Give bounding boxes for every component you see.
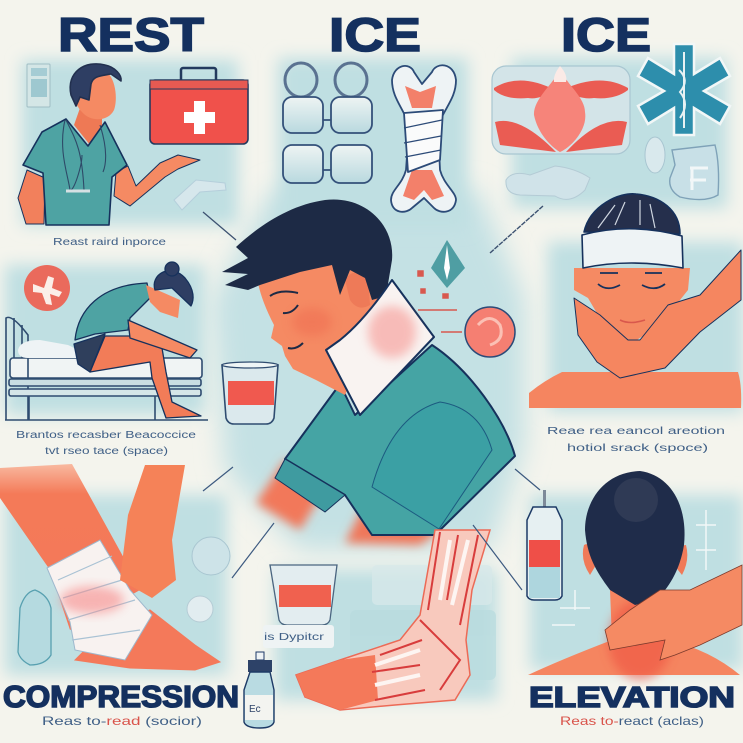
icon: water bottle	[18, 590, 51, 665]
shoulders	[529, 372, 741, 408]
panel: muscle diagram	[492, 66, 630, 154]
icon: water cup	[222, 362, 278, 424]
sparkles	[552, 510, 716, 625]
background pillows	[350, 565, 496, 680]
panel: compression ankle	[0, 464, 274, 670]
face and neck	[258, 250, 385, 395]
ears	[583, 544, 687, 575]
arrow	[203, 467, 274, 578]
caption: rest: Reast raird inporce	[53, 237, 167, 248]
woman figure	[74, 262, 201, 418]
hair	[585, 471, 685, 605]
icon: wall chart	[27, 64, 50, 107]
caption: elevation: Reas to- react (aclas)	[560, 714, 704, 728]
icon: ice ball	[192, 537, 230, 575]
icon: inflamed circle	[465, 307, 515, 357]
title: ELEVATION: ELEVATION	[529, 682, 735, 714]
title: ICE first: ICE	[329, 8, 421, 61]
bed	[5, 317, 208, 420]
icon: spray bottle	[527, 490, 562, 600]
hand	[605, 565, 742, 660]
icon: glass vial	[174, 180, 226, 210]
head	[574, 268, 690, 343]
caption: head: hotiol srack (spoce)	[567, 443, 708, 454]
eye	[270, 292, 303, 348]
caption: head: Reae rea eancol areotion	[547, 426, 725, 437]
caption: resting: tvt rseo tace (space)	[45, 446, 168, 457]
panel: cup and label: is Dypitcr	[264, 632, 325, 643]
panel: bandaged head	[529, 194, 741, 408]
arrow	[473, 469, 540, 590]
nurse figure	[18, 64, 200, 225]
panel: resting woman on bed	[5, 262, 208, 420]
icon: star of life	[638, 44, 730, 135]
arrow	[203, 212, 236, 240]
caption: resting	[16, 430, 197, 457]
leg	[0, 464, 140, 630]
caption: compression: Reas to- read (socior)	[42, 714, 202, 728]
bandage	[47, 540, 152, 660]
ear	[345, 272, 370, 308]
panel: ice packs	[283, 63, 372, 183]
title: REST: REST	[58, 8, 204, 61]
cervical collar	[326, 280, 434, 415]
panel: cup and label	[263, 565, 337, 648]
shirt	[285, 345, 515, 535]
arrow dashed	[490, 206, 543, 253]
arms	[256, 460, 440, 545]
icon: small bottle	[244, 652, 274, 728]
icon: small bottle: Ec	[249, 704, 261, 715]
center background wash	[212, 190, 525, 550]
eyes	[598, 273, 665, 288]
foot	[75, 610, 220, 670]
shoulders	[528, 590, 742, 675]
hand	[120, 465, 185, 598]
panel: neck massage	[528, 471, 742, 680]
title: COMPRESSION: COMPRESSION	[3, 679, 239, 714]
hair	[584, 194, 680, 234]
mouth	[620, 320, 645, 322]
hair	[222, 199, 392, 300]
icon: first aid kit	[150, 68, 248, 144]
headband	[582, 229, 683, 268]
icon: ice bag middle	[506, 166, 590, 199]
panel: foot skeleton	[296, 530, 496, 710]
foot	[296, 530, 490, 710]
icon: teal leaf	[431, 240, 465, 288]
icon: red markers	[418, 271, 462, 332]
caption: head	[547, 426, 725, 454]
icon: ice cube	[187, 596, 213, 622]
panel: rest nurse	[18, 64, 248, 240]
caption: resting: Brantos recasber Beacoccice	[16, 430, 197, 441]
hands	[574, 250, 741, 378]
icon: red cross badge	[24, 265, 70, 311]
title: ICE second: ICE	[561, 8, 651, 61]
icon: bandaged bone	[391, 65, 456, 212]
icon: ice bag right	[645, 137, 719, 200]
central man	[222, 199, 515, 545]
